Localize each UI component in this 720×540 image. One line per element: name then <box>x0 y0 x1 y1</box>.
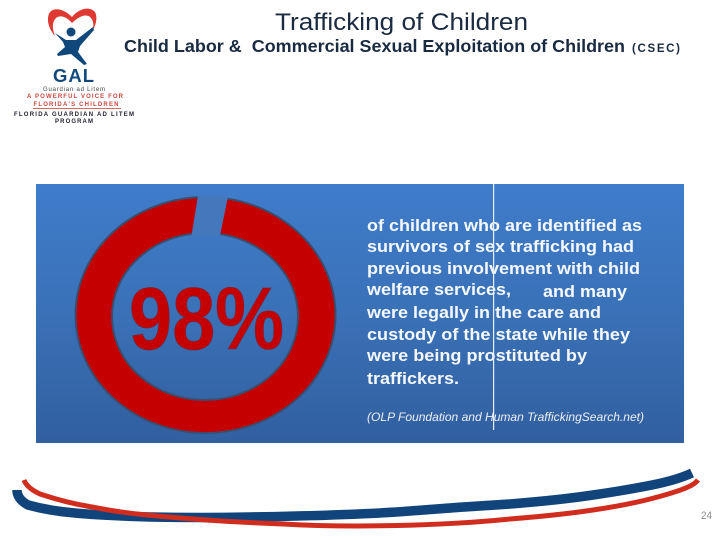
text block: description: of children who are identified as <box>367 216 642 235</box>
text block: description: traffickers. <box>367 369 459 388</box>
statistic: 98%: 98% <box>129 269 284 368</box>
source citation: (OLP Foundation and Human TraffickingSearch.net) <box>367 410 644 424</box>
logo tagline: FLORIDA'S CHILDREN <box>34 102 118 108</box>
subtitle: Child Labor & Commercial Sexual Exploitation of Children <box>124 36 625 56</box>
GAL wordmark: GAL <box>53 65 94 86</box>
logo tagline: PROGRAM <box>55 119 93 125</box>
logo tagline: Guardian ad Litem <box>43 87 105 93</box>
logo tagline <box>14 87 134 125</box>
icon: child figure <box>55 27 94 65</box>
logo: Guardian ad Litem <box>14 9 134 125</box>
title: Trafficking of Children <box>275 9 528 36</box>
text block: description <box>366 216 642 388</box>
logo tagline: FLORIDA GUARDIAN AD LITEM <box>14 112 134 118</box>
red swoosh <box>24 480 698 526</box>
logo tagline: A POWERFUL VOICE FOR <box>27 94 124 100</box>
panel: statistic <box>36 184 684 443</box>
text block: description: were legally in the care and <box>366 303 601 322</box>
icon: heart <box>48 9 96 36</box>
subtitle: (CSEC) <box>632 43 680 55</box>
text block: description: previous involvement with child <box>367 259 640 278</box>
text block: description: and many <box>543 282 628 301</box>
donut chart: 98% <box>76 196 336 433</box>
page number: 24 <box>701 510 712 522</box>
text block: description: custody of the state while they <box>367 325 631 344</box>
text block: description: were being prostituted by <box>366 346 588 365</box>
vertical line <box>493 184 494 430</box>
text block: description: welfare services, <box>366 280 511 299</box>
text block: description: survivors of sex trafficking had <box>367 237 634 256</box>
footer swoosh <box>17 473 698 526</box>
blue swoosh <box>17 473 692 518</box>
